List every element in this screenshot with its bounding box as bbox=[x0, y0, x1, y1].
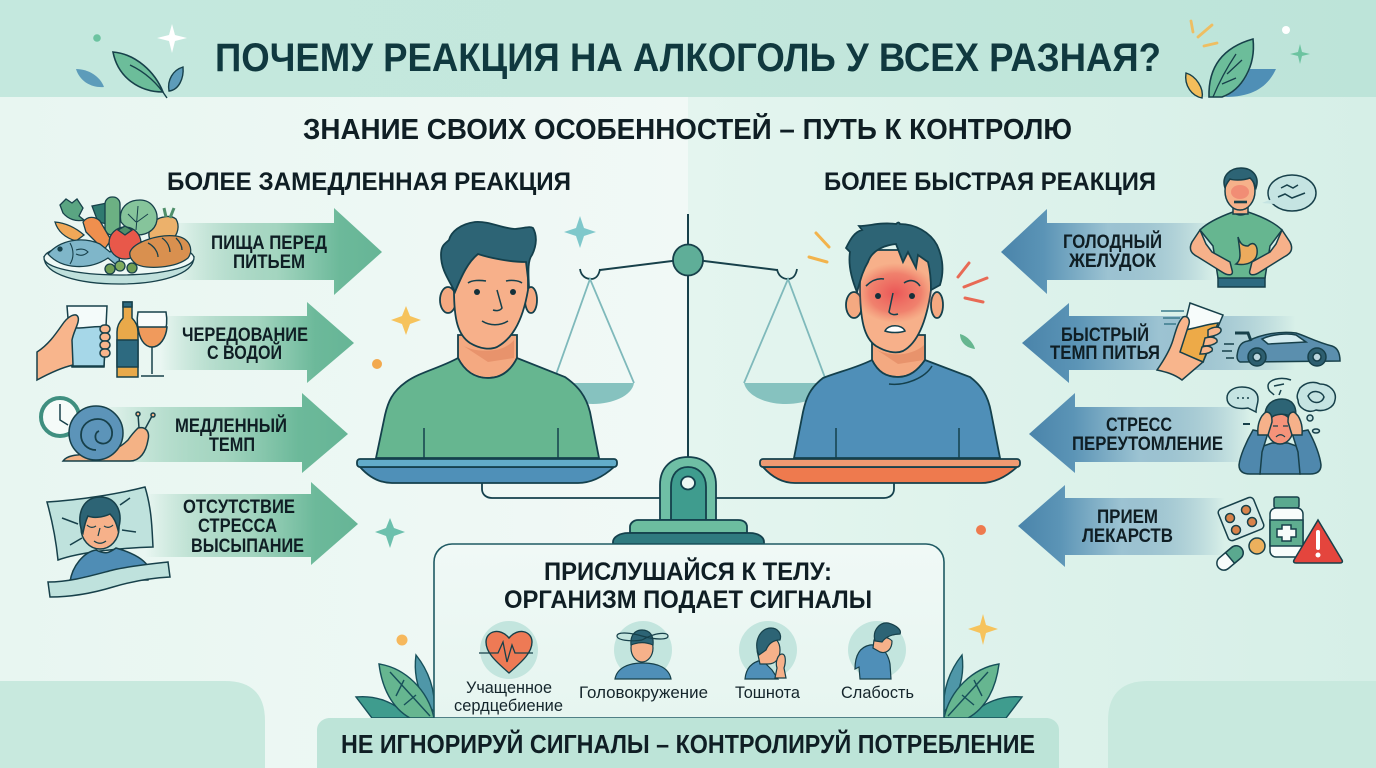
scale: pole, beam and hanging pans bbox=[553, 214, 828, 457]
panel heading: ПРИСЛУШАЙСЯ К ТЕЛУ: bbox=[544, 556, 832, 586]
signal: dizziness bbox=[579, 621, 708, 702]
signal: rapid heartbeat bbox=[454, 621, 563, 715]
signal: weakness bbox=[841, 621, 914, 702]
arrow: alternating with water: С ВОДОЙ bbox=[207, 342, 282, 364]
arrow: slow pace: МЕДЛЕННЫЙ bbox=[175, 415, 287, 437]
arrow: food before drinking bbox=[170, 208, 382, 295]
arrow: slow pace: ТЕМП bbox=[209, 435, 255, 456]
arrow: no stress and good sleep: ОТСУТСТВИЕ bbox=[183, 497, 295, 518]
person: flushed man in blue bbox=[794, 222, 1000, 458]
icon: food plate bbox=[44, 197, 194, 284]
decoration: sparkles and dots bbox=[372, 216, 998, 646]
bottom banner bbox=[317, 718, 1059, 768]
arrow: slow pace bbox=[100, 393, 348, 473]
panel: listen to your body bbox=[434, 544, 944, 718]
icon: sleeping man bbox=[47, 487, 170, 597]
arrow: fast drinking pace bbox=[1022, 303, 1295, 383]
arrow: stress and overwork bbox=[1029, 393, 1250, 473]
arrow: food before drinking: ПИЩА ПЕРЕД bbox=[211, 233, 327, 254]
scale: platforms under people bbox=[357, 459, 1020, 498]
arrow: empty stomach: ЖЕЛУДОК bbox=[1068, 251, 1156, 272]
icon: man with stomach ache bbox=[1190, 168, 1316, 287]
icon: snail and clock bbox=[41, 398, 155, 461]
arrow: no stress and good sleep bbox=[145, 482, 358, 565]
person: calm man in green bbox=[376, 222, 599, 458]
subtitle: ЗНАНИЕ СВОИХ ОСОБЕННОСТЕЙ – ПУТЬ К КОНТРОЛЮ bbox=[303, 112, 1072, 146]
arrow: stress and overwork: СТРЕСС bbox=[1106, 415, 1172, 436]
signal: nausea: Тошнота bbox=[735, 684, 801, 702]
icon: stressed man bbox=[1227, 378, 1335, 474]
arrow: alternating with water: ЧЕРЕДОВАНИЕ bbox=[182, 325, 308, 346]
leaves: left of panel bbox=[356, 655, 434, 718]
arrow: empty stomach bbox=[1001, 209, 1215, 294]
heading: faster reaction: БОЛЕЕ БЫСТРАЯ РЕАКЦИЯ bbox=[824, 168, 1156, 196]
icon: hand with water, beer and wine bbox=[37, 302, 167, 380]
arrow: empty stomach: ГОЛОДНЫЙ bbox=[1063, 231, 1162, 253]
signal: dizziness: Головокружение bbox=[579, 684, 708, 702]
arrow: no stress and good sleep: ВЫСЫПАНИЕ bbox=[191, 536, 304, 557]
icon: fast car bbox=[1222, 332, 1340, 366]
signal: weakness: Слабость bbox=[841, 684, 914, 702]
leaves: right of panel bbox=[944, 655, 1022, 718]
arrow: fast drinking pace: ТЕМП ПИТЬЯ bbox=[1050, 343, 1160, 364]
decoration: top left leaves bbox=[76, 24, 187, 98]
icon: pills and warning bbox=[1214, 496, 1342, 573]
arrow: stress and overwork: ПЕРЕУТОМЛЕНИЕ bbox=[1072, 434, 1223, 455]
arrow: taking medication: ПРИЕМ bbox=[1097, 507, 1158, 528]
arrow: no stress and good sleep: СТРЕССА bbox=[198, 516, 277, 537]
bottom banner: НЕ ИГНОРИРУЙ СИГНАЛЫ – КОНТРОЛИРУЙ ПОТРЕБЛЕНИЕ bbox=[341, 729, 1035, 759]
scale: base stand bbox=[613, 457, 764, 544]
panel heading: ОРГАНИЗМ ПОДАЕТ СИГНАЛЫ bbox=[504, 586, 872, 614]
panel heading bbox=[504, 556, 872, 614]
icon: hand with glass bbox=[1157, 303, 1223, 380]
arrow: fast drinking pace: БЫСТРЫЙ bbox=[1061, 324, 1149, 346]
decoration: top right leaves bbox=[1186, 21, 1310, 98]
title: ПОЧЕМУ РЕАКЦИЯ НА АЛКОГОЛЬ У ВСЕХ РАЗНАЯ? bbox=[215, 36, 1161, 80]
heading: slower reaction: БОЛЕЕ ЗАМЕДЛЕННАЯ РЕАКЦИЯ bbox=[167, 168, 571, 196]
arrow: food before drinking: ПИТЬЕМ bbox=[233, 252, 305, 273]
arrow: taking medication bbox=[1018, 485, 1225, 567]
signal: rapid heartbeat: Учащенное bbox=[466, 679, 552, 697]
signal: rapid heartbeat: сердцебиение bbox=[454, 697, 563, 715]
arrow: alternating with water bbox=[160, 302, 354, 383]
arrow: taking medication: ЛЕКАРСТВ bbox=[1082, 526, 1173, 547]
signal: nausea bbox=[735, 621, 801, 702]
